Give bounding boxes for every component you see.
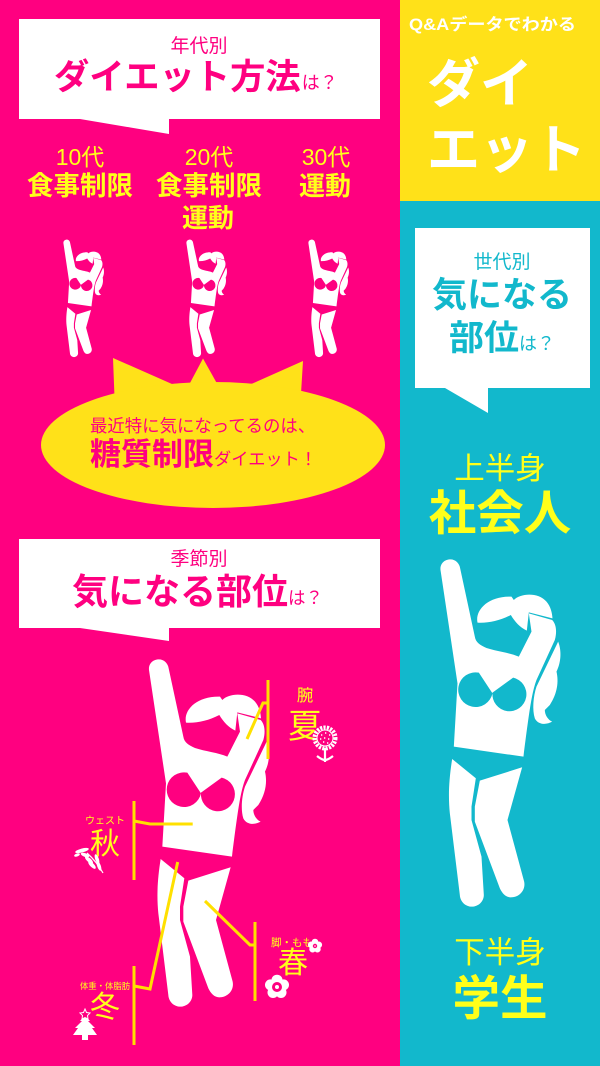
- background: pink panel: [0, 0, 400, 1066]
- age column: 20s: 食事制限: [156, 171, 262, 201]
- bubble heading: ダイエット方法は？: [54, 57, 338, 97]
- icon: small cherry blossom: [308, 939, 322, 952]
- bubble heading line 1: 気になる: [432, 276, 572, 315]
- speech bubble: diet method by age: [19, 19, 380, 134]
- leader line: waist: [134, 801, 193, 880]
- label: winter body weight: 体重・体脂肪: [80, 981, 131, 991]
- panel: title block: [400, 0, 600, 201]
- speech bubble: body part by season: [19, 539, 380, 641]
- bubble kicker: 世代別: [473, 251, 531, 273]
- value: students: 学生: [452, 973, 548, 1026]
- label: autumn waist: 秋: [90, 828, 120, 861]
- age column: 30s: [299, 144, 351, 201]
- callout: recent trend: [41, 358, 385, 508]
- speech bubble: body part by generation: [415, 228, 590, 413]
- bubble heading line 2: 部位は？: [449, 319, 555, 358]
- label: spring legs: 春: [278, 947, 308, 980]
- bubble kicker: 季節別: [170, 548, 228, 570]
- figure: large seasonal: [149, 659, 269, 1007]
- main title line 2: エット: [427, 121, 586, 180]
- leader line: arm: [247, 680, 268, 759]
- icon: large cherry blossom: [265, 975, 289, 998]
- label: spring legs: 脚・もも: [271, 936, 313, 949]
- bubble heading: 気になる部位は？: [72, 571, 323, 612]
- age column: 20s: 20代: [185, 144, 233, 170]
- icon: christmas tree: [73, 1009, 97, 1040]
- figure: 10s: [63, 240, 104, 357]
- panel: teal generation panel: [400, 201, 600, 1066]
- value: working adults: 社会人: [429, 488, 571, 541]
- callout line 2: 糖質制限ダイエット！: [90, 437, 317, 472]
- figure: 30s: [308, 240, 349, 357]
- age column: 30s: 30代: [302, 144, 350, 170]
- leader line: body weight: [134, 862, 178, 1045]
- age column: 10s: 10代: [56, 144, 104, 170]
- age column: 20s: 運動: [182, 203, 234, 233]
- label: lower body: 下半身: [454, 936, 546, 970]
- leader line: legs: [205, 901, 255, 1001]
- icon: sunflower: [314, 728, 336, 762]
- label: autumn waist: ウェスト: [85, 815, 125, 827]
- label: upper body: 上半身: [454, 452, 546, 486]
- age column: 10s: [27, 144, 133, 201]
- label: autumn waist: [85, 815, 125, 861]
- label: summer arm: 夏: [288, 708, 322, 746]
- icon: rice plant: [74, 847, 103, 873]
- title kicker: Q&Aデータでわかる: [409, 14, 576, 34]
- figure: large generation: [440, 559, 560, 907]
- age column: 10s: 食事制限: [27, 171, 133, 201]
- label: summer arm: 腕: [297, 686, 313, 705]
- age column: 20s: [156, 144, 262, 233]
- label: summer arm: [288, 686, 322, 746]
- label: winter body weight: [80, 981, 131, 1024]
- callout line 1: 最近特に気になってるのは、: [90, 416, 315, 436]
- label: winter body weight: 冬: [90, 991, 120, 1024]
- figure: 20s: [186, 240, 227, 357]
- bubble kicker: 年代別: [170, 35, 228, 57]
- age column: 30s: 運動: [299, 171, 351, 201]
- label: spring legs: [271, 936, 313, 980]
- main title line 1: ダイ: [427, 55, 533, 114]
